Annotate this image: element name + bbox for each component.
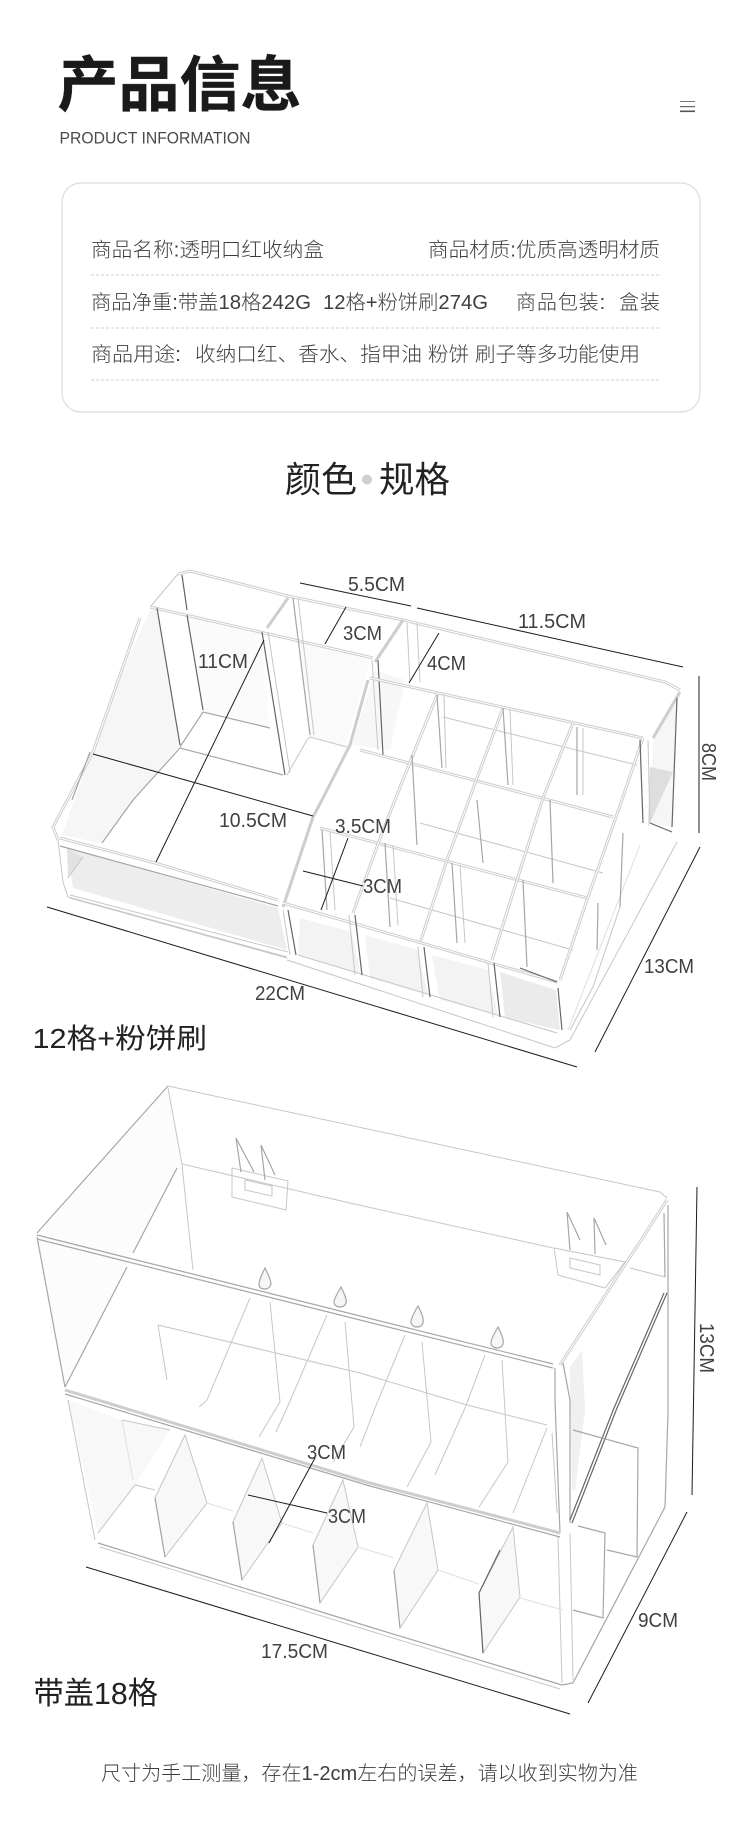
12-grid slopes <box>283 680 368 907</box>
dimension labels: 12-grid: 22CM <box>255 982 305 1005</box>
net weight, 12 grid: 12格+粉饼刷274G <box>323 291 488 314</box>
rear dividers and drops <box>199 1268 557 1513</box>
lid bottom rim <box>65 1390 560 1533</box>
packaging: 商品包装: 盒装 <box>516 291 660 314</box>
lid right side <box>555 1368 560 1533</box>
lid top <box>168 1086 667 1198</box>
tinted panes <box>68 1400 170 1533</box>
icon: menu <box>680 101 695 112</box>
dimension labels: 12-grid: 3.5CM <box>335 815 391 838</box>
dimension labels: 12-grid: 8CM <box>697 743 720 781</box>
tinted panes <box>67 848 287 950</box>
dimension labels: 12-grid: 3CM <box>343 622 382 645</box>
left wall <box>150 574 178 607</box>
dimension labels: 12-grid: 3CM <box>363 875 402 898</box>
dimension labels: lidded <box>261 1323 718 1663</box>
base plate <box>70 842 677 1048</box>
dimension labels: lidded: 13CM <box>695 1323 718 1373</box>
back partition <box>158 1325 547 1425</box>
heading: colour and specification <box>285 459 450 500</box>
dimension labels: 12-grid: 11.5CM <box>518 610 586 633</box>
net weight, lidded: 商品净重:带盖18格242G <box>91 291 311 314</box>
dimension labels: lidded: 3CM <box>328 1505 366 1528</box>
hinge right <box>554 1212 625 1288</box>
back compartments <box>157 608 180 745</box>
heading: colour and specification: 规格 <box>379 459 450 500</box>
product photo: lidded 18-grid organiser <box>37 1086 668 1689</box>
dimension labels: 12-grid: 13CM <box>644 955 694 978</box>
footnote: 尺寸为手工测量，存在1-2cm左右的误差，请以收到实物为准 <box>101 1762 638 1785</box>
dimension lines: 12-grid <box>47 583 700 1067</box>
hinge left <box>232 1138 288 1210</box>
usage text: 收纳口红、香水、指甲油 粉饼 刷子等多功能使用 <box>195 343 640 366</box>
label: 12 grid plus powder brush: 12格+粉饼刷 <box>32 1023 207 1054</box>
dimension labels: 12-grid: 11CM <box>198 650 248 673</box>
front dividers <box>155 1435 563 1653</box>
dimension labels: 12-grid <box>198 573 720 1005</box>
subtitle: PRODUCT INFORMATION <box>60 128 250 148</box>
back rim <box>178 571 680 690</box>
partition rim <box>150 607 373 658</box>
dimension labels: 12-grid: 10.5CM <box>219 809 287 832</box>
lid front rim <box>37 1235 553 1364</box>
usage label: 商品用途: <box>91 343 181 366</box>
right wall <box>653 692 680 738</box>
cell verticals <box>437 695 577 795</box>
right back panes <box>573 1430 638 1557</box>
base <box>68 1400 95 1540</box>
dimension labels: lidded: 17.5CM <box>261 1640 328 1663</box>
front-left rim <box>60 838 278 900</box>
12-grid rows <box>370 678 643 738</box>
divider above grid <box>375 620 403 662</box>
label: lidded 18 grid: 带盖18格 <box>34 1676 158 1711</box>
dimension labels: lidded: 9CM <box>638 1609 678 1632</box>
dimension labels: lidded: 3CM <box>307 1441 346 1464</box>
front rim and posts <box>283 903 557 982</box>
product material: 商品材质:优质高透明材质 <box>428 238 660 262</box>
heading: colour and specification: 颜色 <box>285 459 357 500</box>
title: 产品信息 <box>58 52 302 119</box>
product name: 商品名称:透明口红收纳盒 <box>91 238 324 262</box>
dimension labels: 12-grid: 4CM <box>427 652 466 675</box>
dimension labels: 12-grid: 5.5CM <box>348 573 405 596</box>
dimension lines: lidded <box>86 1187 697 1714</box>
product photo: 12-grid organiser <box>53 571 680 1048</box>
panel: product details card <box>62 183 700 412</box>
